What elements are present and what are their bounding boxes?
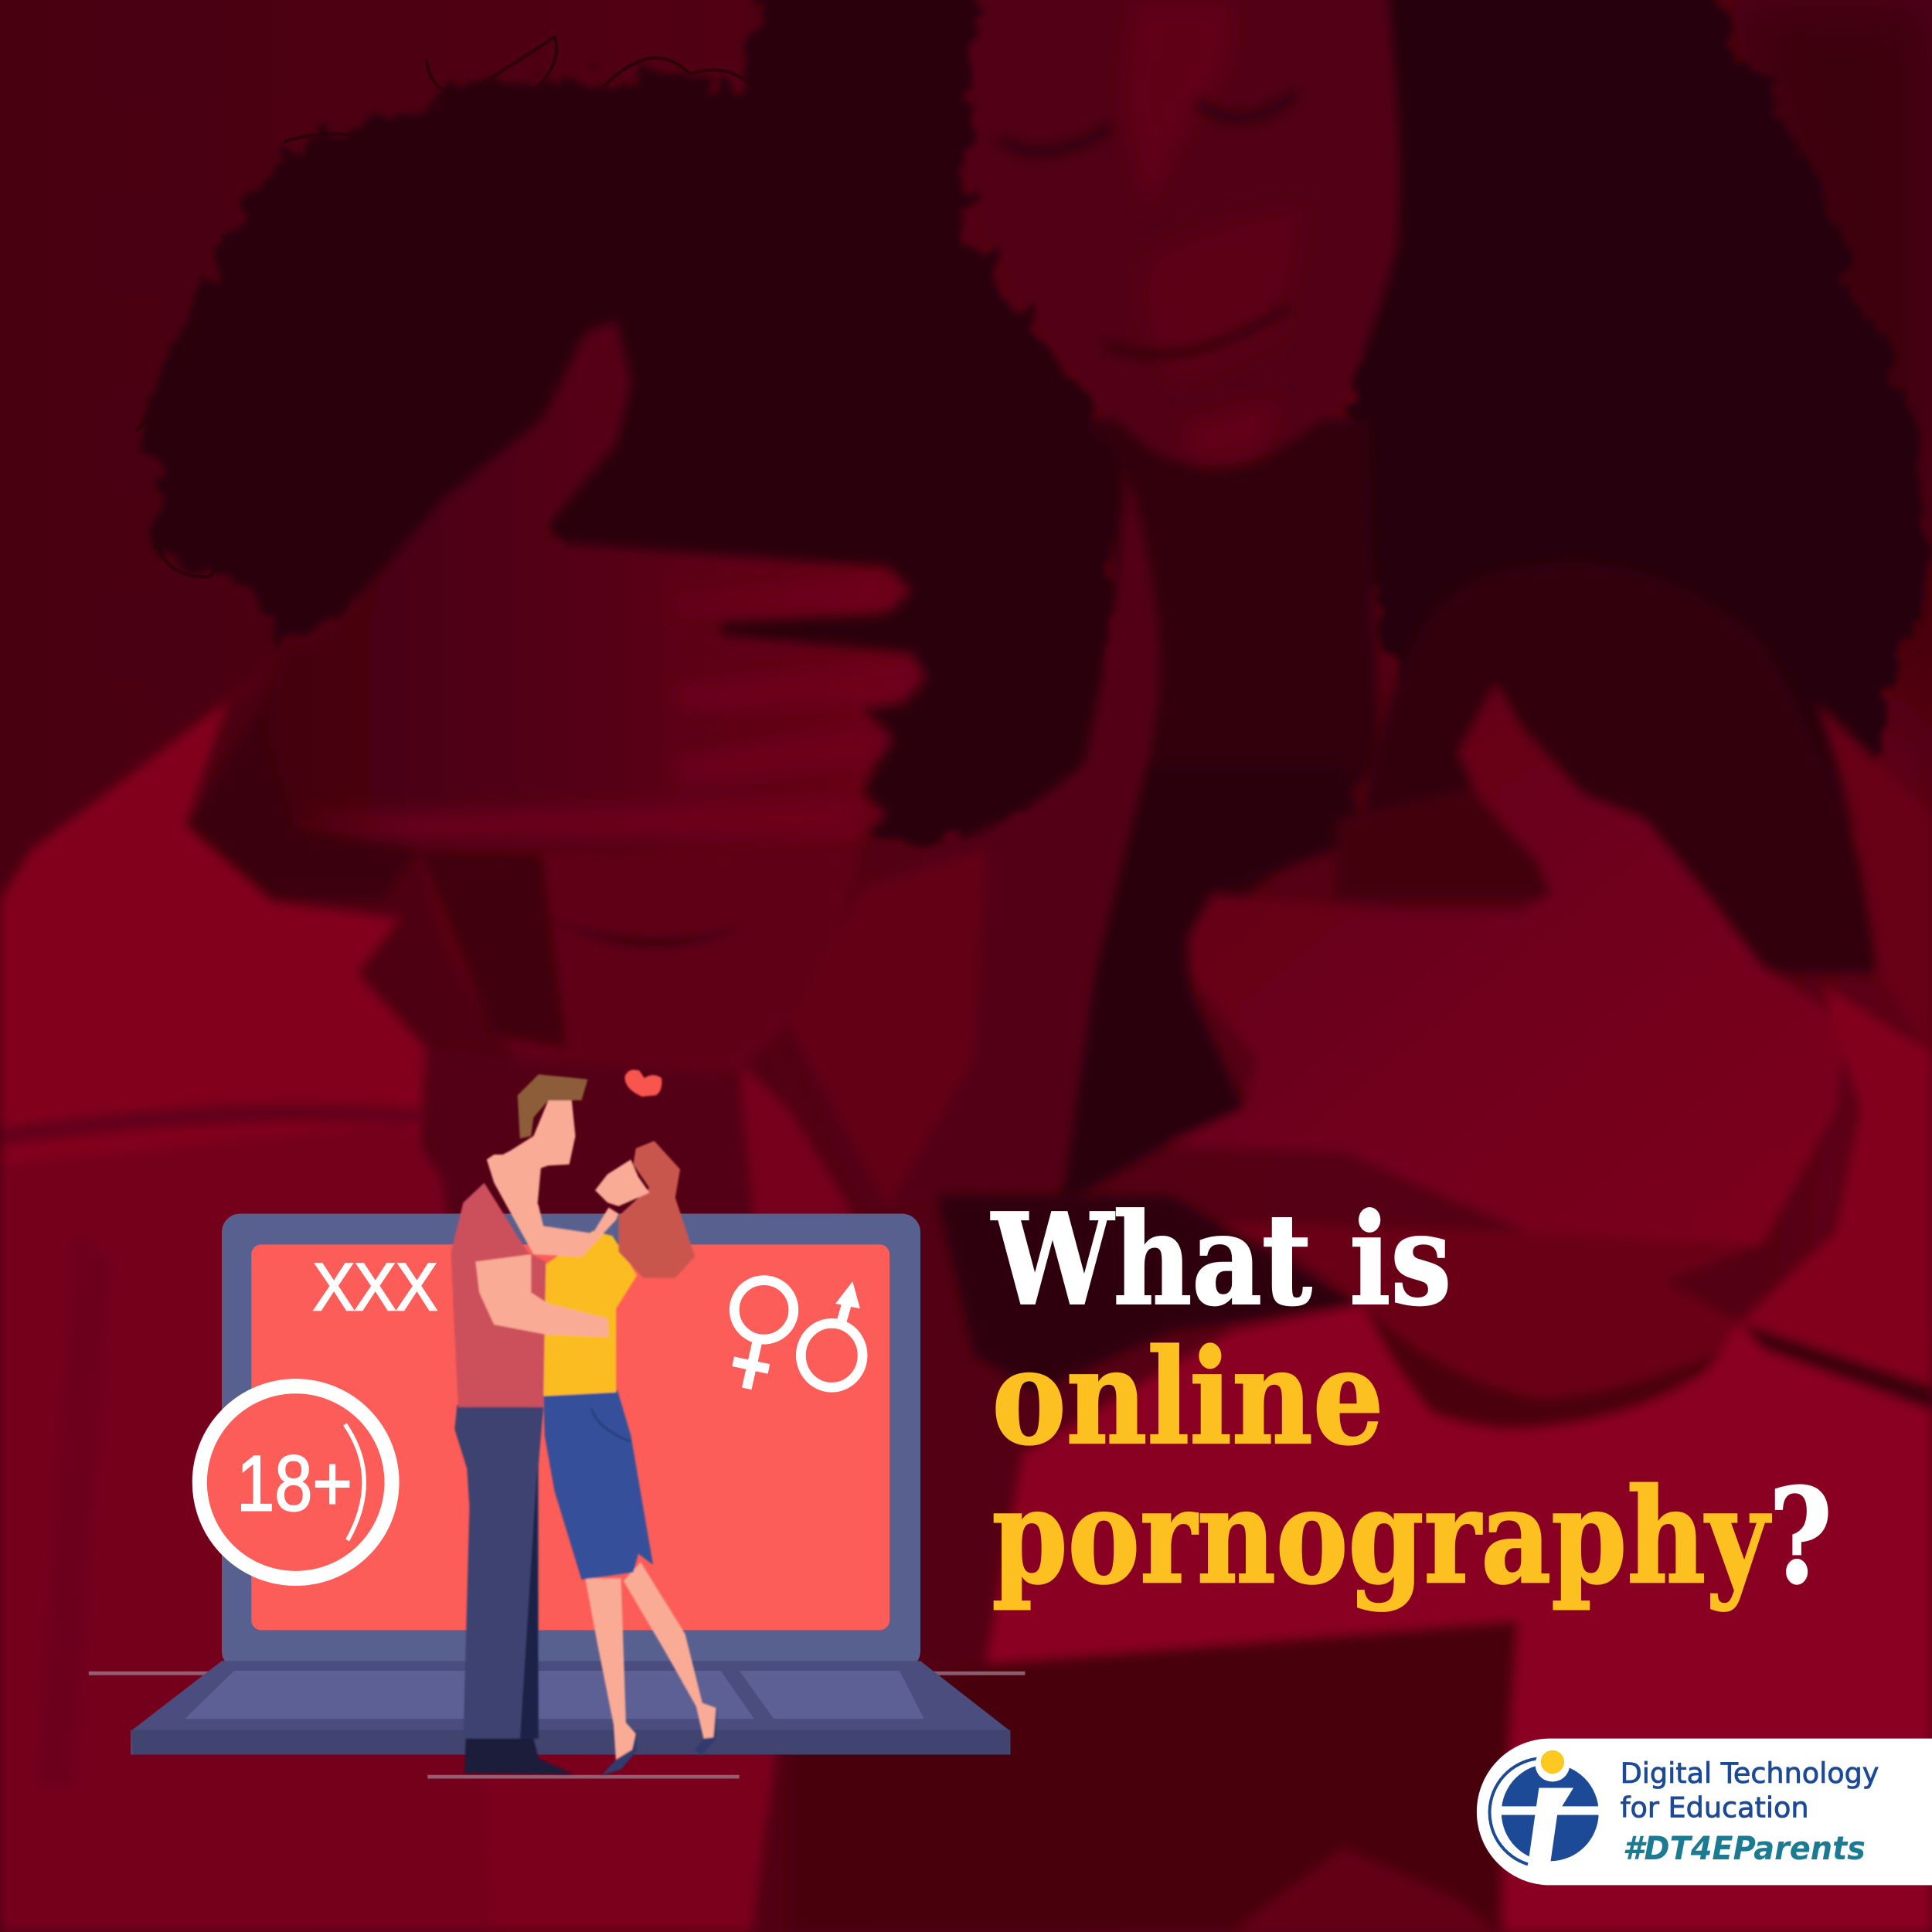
logo badge <box>1477 1739 1932 1885</box>
man's smile <box>549 918 752 947</box>
heading line: pornography?: pornography? <box>992 1459 1832 1613</box>
icon: 18+ badge: 18+ <box>236 1440 352 1528</box>
woman's sleeve right <box>1740 986 1932 1405</box>
man's curly hair <box>141 0 1119 850</box>
woman's hair <box>1343 0 1923 862</box>
text: Digital Technology for Education: Digital Technology <box>1621 1757 1879 1790</box>
heading line: What is: What is <box>991 1186 1451 1334</box>
hand on baby <box>1165 684 1849 1244</box>
man's lower face <box>419 825 862 1074</box>
icon: heart <box>624 1070 662 1097</box>
right-hand upper sleeve area <box>1816 702 1932 1060</box>
icon: 18+ badge <box>199 1386 392 1578</box>
woman's face <box>949 0 1400 466</box>
man's shirt sleeve and collar <box>0 653 425 1183</box>
dark cuff <box>185 684 419 900</box>
baby's chin <box>1146 1219 1762 1427</box>
illustration: embracing couple <box>451 1070 717 1776</box>
woman's shoes <box>601 1733 637 1776</box>
shirt fold <box>0 1103 429 1146</box>
woman's face <box>595 1159 649 1206</box>
finger highlights <box>296 579 912 838</box>
text: hashtag: #DT4EParents <box>1623 1830 1866 1867</box>
baby's shirt <box>986 1304 1932 1932</box>
baby's head <box>1355 562 1878 974</box>
keyboard panels <box>185 1671 754 1719</box>
badge background <box>1477 1739 1932 1885</box>
woman's legs <box>585 1578 636 1762</box>
man's neck and face <box>503 1100 576 1207</box>
woman's skirt <box>543 1389 653 1580</box>
laptop lid <box>222 1213 920 1669</box>
text: Digital Technology for Education: for Education <box>1621 1791 1809 1825</box>
woman's hair <box>618 1141 695 1277</box>
man's hair <box>518 1074 588 1138</box>
text: XXX: XXX <box>313 1250 437 1325</box>
man's shoes <box>464 1739 573 1774</box>
man's neck shadow <box>425 1047 754 1219</box>
laptop illustration <box>89 1213 1026 1777</box>
hand over man's eyes <box>265 321 927 856</box>
heading line: online: online <box>992 1320 1383 1474</box>
icon: gender symbols <box>733 1281 862 1389</box>
woman's arm along man's head <box>788 474 1160 1207</box>
dark centre <box>1060 764 1368 1207</box>
woman's yellow top <box>543 1231 637 1396</box>
man's trousers <box>454 1405 543 1739</box>
loose curls <box>135 37 752 577</box>
man's shirt lower <box>0 1121 518 1932</box>
heading <box>991 1186 1832 1613</box>
laptop in lower centre <box>788 1621 1518 1932</box>
text: Digital Technology for Education <box>1621 1757 1879 1825</box>
icon: DT4E logo <box>1490 1747 1602 1866</box>
laptop base <box>131 1661 1010 1754</box>
dark collar shadow <box>937 1196 1362 1393</box>
man's shirt <box>451 1183 546 1407</box>
man's arm <box>475 1254 609 1337</box>
woman's facial features <box>1003 96 1293 355</box>
skirt pocket <box>591 1408 631 1441</box>
baby's chin shadow <box>1362 1304 1725 1429</box>
man's right collar <box>740 1062 856 1219</box>
woman's arm <box>487 1155 618 1257</box>
woman's neck <box>1084 419 1380 986</box>
laptop screen <box>251 1244 889 1630</box>
motion lines <box>89 1673 1026 1777</box>
baby's cheek under hand <box>1335 788 1553 900</box>
